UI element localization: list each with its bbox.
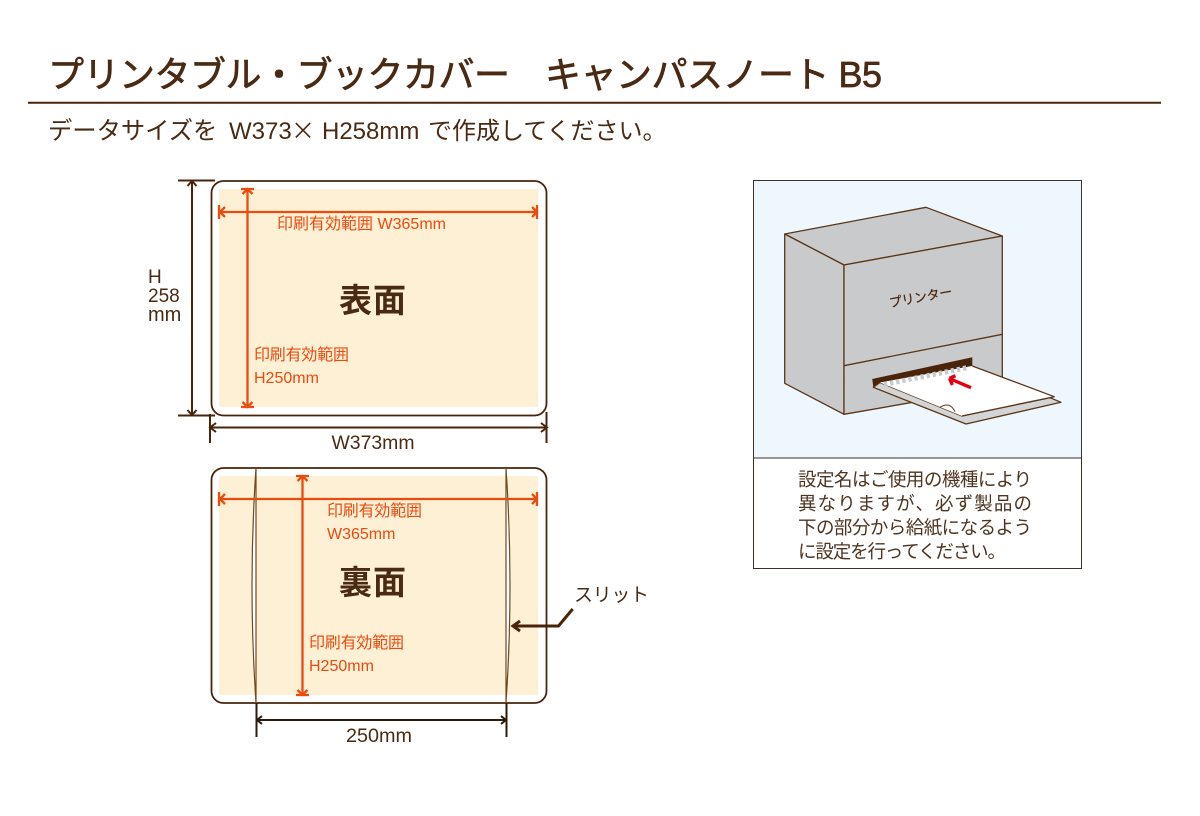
slit callout: スリット <box>574 585 649 606</box>
spiral binding <box>884 368 968 384</box>
subtitle: データサイズを <box>48 118 217 145</box>
printer note: 設定名はご使用の機種により <box>798 469 1032 490</box>
slit spacing dimension: 250mm <box>346 726 412 747</box>
front height arrow <box>241 189 254 407</box>
title: プリンタブル・ブックカバー キャンパスノート B5 <box>48 54 882 95</box>
subtitle: で作成してください。 <box>428 118 667 145</box>
header rule <box>28 102 1161 104</box>
notebook thumb cut <box>940 405 955 412</box>
front width arrow <box>219 205 537 219</box>
front width label: 印刷有効範囲 W365mm <box>277 215 446 233</box>
printer label: プリンター <box>888 284 953 310</box>
printer note: 異なりますが、必ず製品の <box>798 493 1032 514</box>
subtitle: W373 <box>229 118 292 145</box>
front height label: 印刷有効範囲 <box>254 346 349 364</box>
overall width dimension <box>210 412 547 454</box>
subtitle: × <box>291 111 315 146</box>
back height label <box>309 634 404 675</box>
overall height dimension: 258 <box>148 286 180 307</box>
printer note: に設定を行ってください。 <box>798 541 1006 562</box>
printer panel <box>754 180 1082 568</box>
slit curves <box>252 468 510 703</box>
slit callout <box>513 585 649 631</box>
subtitle <box>48 111 667 146</box>
printer note: 下の部分から給紙になるよう <box>798 517 1032 538</box>
red arrow <box>950 376 971 388</box>
subtitle: H258mm <box>322 118 419 145</box>
back height label: 印刷有効範囲 <box>309 634 404 652</box>
overall height dimension: H <box>148 267 162 288</box>
overall width dimension: W373mm <box>332 433 414 454</box>
printer note <box>798 469 1032 562</box>
overall height dimension <box>148 180 215 416</box>
front panel diagram <box>212 181 546 416</box>
back height arrow <box>296 476 309 695</box>
back panel diagram <box>212 468 546 703</box>
back width label: W365mm <box>327 526 395 543</box>
back width label: 印刷有効範囲 <box>327 502 422 520</box>
back height label: H250mm <box>309 658 374 675</box>
back heading: 裏面 <box>339 564 406 601</box>
front height label: H250mm <box>254 370 319 387</box>
paper slot <box>872 357 972 387</box>
slit spacing dimension <box>256 703 506 747</box>
notebook back cover <box>873 382 1061 424</box>
back width label <box>327 502 422 543</box>
front height label <box>254 346 349 387</box>
notebook page <box>880 366 1054 416</box>
overall height dimension: mm <box>148 304 181 326</box>
back width arrow <box>219 492 537 506</box>
printer illustration <box>785 207 1061 424</box>
front heading: 表面 <box>339 282 406 319</box>
